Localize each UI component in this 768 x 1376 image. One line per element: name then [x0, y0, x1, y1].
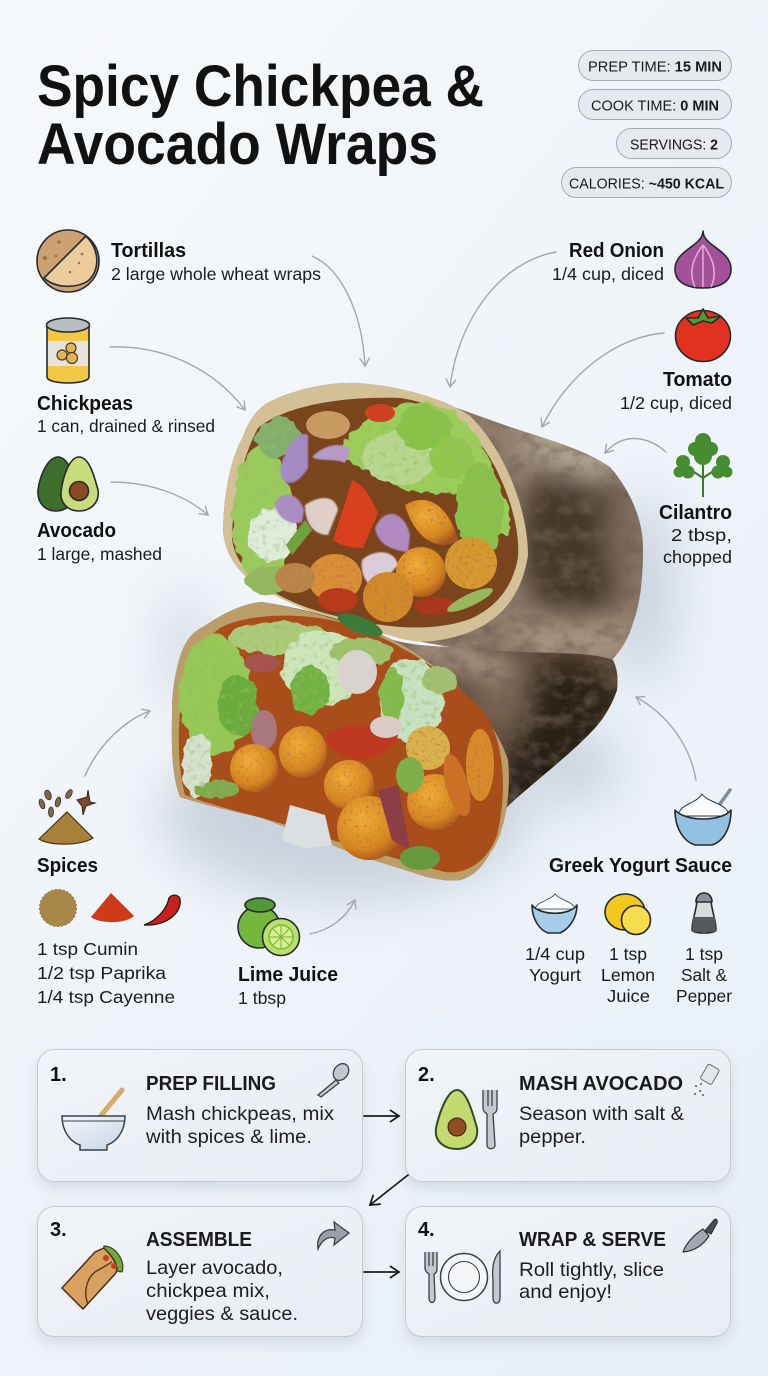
icon: cilantro — [674, 433, 732, 497]
icon: cumin — [40, 890, 76, 926]
ingredient: red onion: Red Onion — [569, 240, 664, 262]
ingredient: spices: 1/4 tsp Cayenne — [37, 987, 175, 1007]
wrap photo illustration — [160, 375, 676, 900]
step card 4: wrap and serve: 4. — [418, 1219, 435, 1241]
ingredient: tortillas: 2 large whole wheat wraps — [111, 264, 321, 284]
ingredient: greek yogurt sauce: 1/4 cup — [525, 944, 585, 964]
pill: calories — [562, 168, 732, 198]
step card 1: prep filling — [38, 1050, 362, 1182]
step card 4: wrap and serve: WRAP & SERVE — [519, 1229, 666, 1251]
ingredient: greek yogurt sauce: 1 tsp — [609, 944, 647, 964]
step card 4: wrap and serve: and enjoy! — [519, 1281, 612, 1303]
icon: curved arrow — [318, 1222, 349, 1249]
arrow: cilantro to wrap — [605, 439, 666, 453]
step card 3: assemble: Layer avocado, — [146, 1257, 283, 1279]
icon: cayenne chili — [144, 895, 180, 925]
ingredient: chickpeas: Chickpeas — [37, 393, 133, 415]
step card 2: mash avocado — [406, 1050, 730, 1182]
title: Avocado Wraps — [37, 112, 438, 177]
ingredient: greek yogurt sauce: Greek Yogurt Sauce — [549, 855, 732, 877]
step card 3: assemble — [38, 1206, 362, 1336]
lower wrap half — [165, 595, 625, 890]
pill: calories: CALORIES: ~450 KCAL — [569, 176, 724, 192]
ingredient: greek yogurt sauce: Lemon — [601, 965, 655, 985]
step card 2: mash avocado: Season with salt & — [519, 1103, 684, 1125]
icon: avocado — [38, 457, 98, 511]
ingredient: spices: 1 tsp Cumin — [37, 939, 138, 959]
icon: mixing bowl — [62, 1090, 125, 1150]
ingredient: avocado: 1 large, mashed — [37, 544, 162, 564]
ingredient: greek yogurt sauce: Yogurt — [529, 965, 581, 985]
pill: prep time — [578, 50, 732, 80]
step card 3: assemble: veggies & sauce. — [146, 1303, 298, 1325]
outer tortilla, upper — [223, 382, 643, 660]
icon: small yogurt bowl — [532, 894, 577, 933]
icon: spoon — [318, 1061, 352, 1097]
ingredient: lime juice: Lime Juice — [238, 964, 338, 986]
ingredient: spices: Spices — [37, 855, 98, 877]
icon: yogurt bowl — [675, 790, 731, 845]
pill: cook time — [578, 90, 732, 120]
icon: fork, plate and knife — [425, 1251, 500, 1303]
ingredient: cilantro: chopped — [663, 547, 732, 567]
icon: spice pile and seeds — [38, 788, 95, 844]
ingredient: lime juice — [238, 898, 338, 1008]
step card 1: prep filling: Mash chickpeas, mix — [146, 1103, 334, 1125]
step card 1: prep filling: PREP FILLING — [146, 1073, 276, 1095]
lower wrap filling — [179, 609, 503, 872]
icon: paprika — [91, 893, 134, 922]
red onion pieces — [275, 434, 410, 586]
icon: red onion — [675, 231, 731, 288]
title: Spicy Chickpea & — [37, 54, 484, 119]
arrow: tortillas to wrap — [312, 256, 365, 366]
ingredient: tortillas — [37, 230, 321, 292]
ingredient: avocado — [37, 457, 162, 564]
pill: prep time: PREP TIME: 15 MIN — [588, 60, 722, 76]
icon: chickpea can — [46, 318, 90, 383]
title — [37, 54, 484, 177]
recipe stat pills — [562, 50, 732, 198]
step card 2: mash avocado: 2. — [418, 1064, 435, 1086]
icon: fork — [483, 1090, 497, 1149]
arrow: tomato to wrap — [542, 333, 664, 427]
tortilla rim, upper — [223, 383, 528, 641]
ingredient: chickpeas — [37, 318, 215, 436]
step card 1: prep filling: 1. — [50, 1064, 67, 1086]
ingredient: cilantro — [659, 433, 732, 567]
ingredient: spices: 1/2 tsp Paprika — [37, 963, 166, 983]
icon: tortillas — [37, 230, 99, 292]
upper wrap half — [223, 382, 643, 660]
icon: tomato — [676, 309, 730, 362]
arrow: spices to wrap — [85, 711, 150, 776]
icon: lime — [238, 898, 300, 956]
ingredient: spices — [37, 788, 180, 1007]
step card 3: assemble: ASSEMBLE — [146, 1229, 252, 1251]
ingredient: avocado: Avocado — [37, 520, 116, 542]
pill: servings: SERVINGS: 2 — [630, 138, 718, 154]
ingredient: greek yogurt sauce: 1 tsp — [685, 944, 723, 964]
icon: salt shaker — [692, 893, 716, 933]
outer tortilla, lower — [165, 595, 625, 890]
ingredient: greek yogurt sauce — [525, 790, 732, 1006]
pill: servings — [616, 128, 732, 158]
ingredient: cilantro: Cilantro — [659, 502, 732, 524]
icon: chef knife — [683, 1219, 717, 1252]
arrow: step 1 to step 2 — [364, 1115, 399, 1117]
ingredient: lime juice: 1 tbsp — [238, 988, 286, 1008]
step card 3: assemble: 3. — [50, 1219, 67, 1241]
ingredient: cilantro: 2 tbsp, — [671, 525, 732, 545]
tortilla rim, lower — [172, 602, 509, 881]
ingredient: greek yogurt sauce: Juice — [607, 986, 650, 1006]
upper wrap filling — [232, 398, 518, 628]
pill: cook time: COOK TIME: 0 MIN — [591, 98, 719, 114]
icon: burrito — [62, 1246, 123, 1309]
ingredient: tomato: Tomato — [663, 369, 732, 391]
arrow: lime to wrap — [310, 900, 355, 934]
ingredient: greek yogurt sauce: Pepper — [676, 986, 732, 1006]
arrow: red onion to wrap — [450, 252, 556, 387]
ingredient: tortillas: Tortillas — [111, 240, 186, 262]
step card 4: wrap and serve — [406, 1206, 730, 1336]
ingredient: red onion — [552, 231, 731, 288]
icon: lemon — [605, 894, 650, 934]
soft shadow — [160, 495, 676, 900]
icon: salt shaker sprinkling — [694, 1064, 720, 1096]
ingredient: chickpeas: 1 can, drained & rinsed — [37, 416, 215, 436]
step card 2: mash avocado: MASH AVOCADO — [519, 1073, 683, 1095]
step card 1: prep filling: with spices & lime. — [145, 1126, 312, 1148]
arrow: step 3 to step 4 — [364, 1271, 399, 1273]
ingredient: red onion: 1/4 cup, diced — [552, 264, 664, 284]
arrow: avocado to wrap — [111, 482, 208, 515]
step card 2: mash avocado: pepper. — [519, 1126, 586, 1148]
ingredient: greek yogurt sauce: Salt & — [681, 965, 727, 985]
ingredient: tomato — [620, 309, 732, 413]
step card 4: wrap and serve: Roll tightly, slice — [519, 1259, 664, 1281]
arrow: step 2 to step 3 — [370, 1175, 408, 1205]
arrow: chickpeas to wrap — [110, 347, 245, 410]
step card 3: assemble: chickpea mix, — [146, 1280, 270, 1302]
ingredient: tomato: 1/2 cup, diced — [620, 393, 732, 413]
icon: avocado half — [436, 1090, 477, 1149]
arrow: yogurt to wrap — [636, 697, 696, 780]
